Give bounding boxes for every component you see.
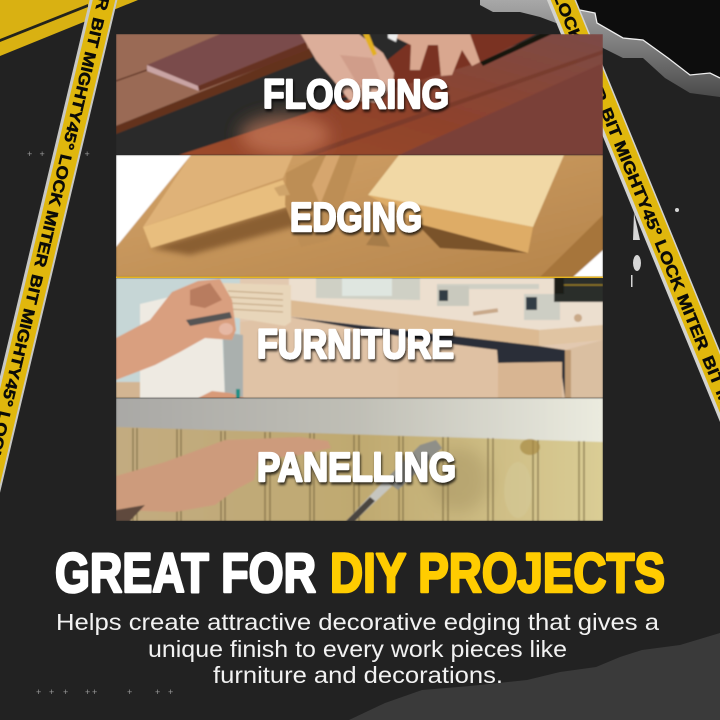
plus marks: upper: + [40,149,45,159]
plus marks: lower: + [63,687,68,697]
yellow corner stripe [0,0,138,56]
description text [56,609,660,688]
plus marks: lower: + [49,687,54,697]
label: flooring: FLOORING [263,71,449,117]
tape: left [0,0,174,527]
tape: left: BIT MIGHTY45° LOCK MITER [30,16,106,269]
panel: edging [116,155,603,277]
plus marks: lower: + [36,687,41,697]
plus marks: upper: + [84,149,90,159]
plus marks: upper: + [27,149,32,159]
plus marks: lower: + [168,687,173,697]
plus marks: lower: + [92,687,97,697]
heading: GREAT FOR [55,541,316,604]
description text: unique finish to every work pieces like [148,636,567,662]
tape: right [492,0,720,602]
label: panelling: PANELLING [257,444,456,490]
plus marks: upper [27,149,90,159]
plus marks: lower [36,687,173,697]
torn paper: top right [480,0,720,97]
plus marks: lower: + [155,687,160,697]
label: furniture: FURNITURE [257,321,454,367]
paint specks [631,208,679,287]
panel: flooring [116,34,603,155]
label: edging: EDGING [290,194,422,240]
tape: right: BIT MIGHTY45° LOCK MITER [597,106,711,353]
description text: Helps create attractive decorative edging that gives a [56,609,660,635]
panel: panelling [116,398,603,521]
heading [55,541,665,604]
plus marks: lower: + [85,687,90,697]
description text: furniture and decorations. [213,662,503,688]
torn paper: bottom right [349,633,720,720]
panel: furniture [116,278,603,398]
plus marks: lower: + [127,687,132,697]
divider: yellow line [116,276,603,278]
